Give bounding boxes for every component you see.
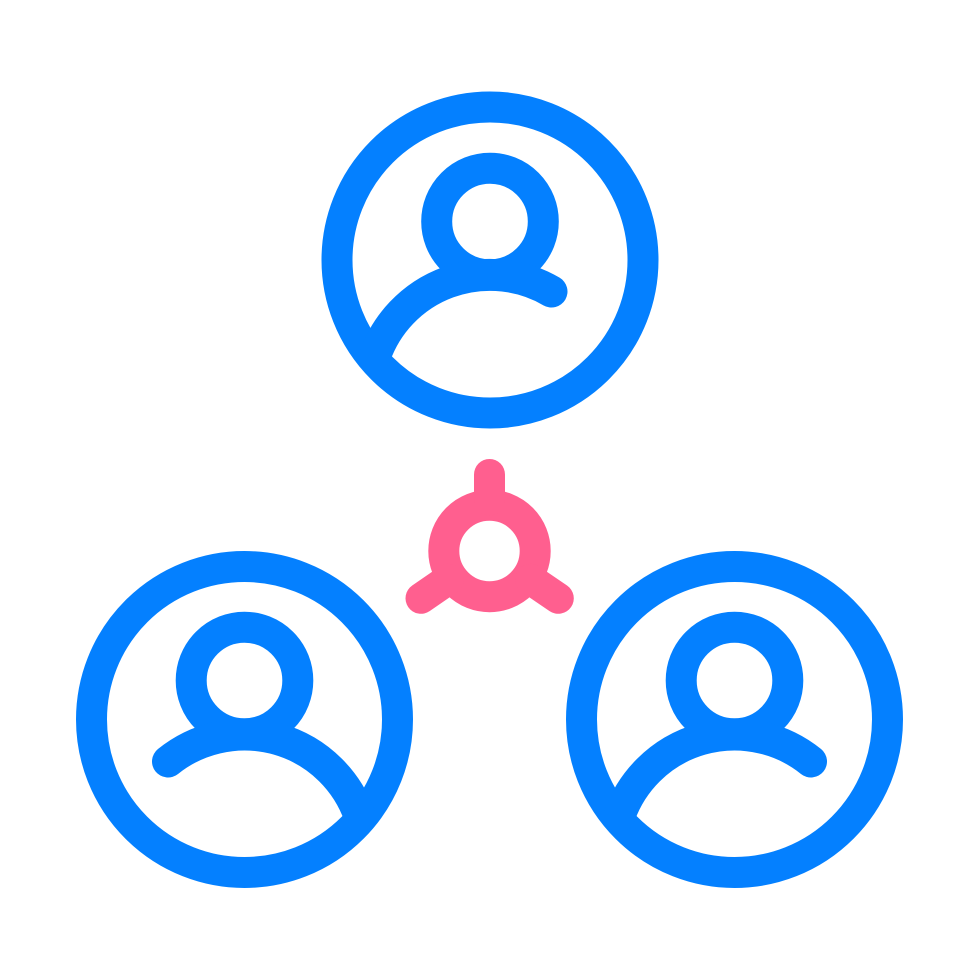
top user head (437, 168, 543, 275)
icon: top user (337, 107, 643, 413)
bottom right user shoulders (620, 735, 811, 816)
connector top arm (474, 474, 505, 500)
icon: central pink connector (421, 474, 558, 598)
bottom left user ring (92, 566, 398, 872)
icon: bottom right user (582, 566, 888, 872)
bottom left user head (191, 627, 298, 734)
bottom left user shoulders (168, 735, 360, 816)
bottom right user head (681, 627, 788, 734)
connector left arm (421, 579, 448, 598)
icon: bottom left user (92, 566, 398, 872)
connector right arm (531, 579, 558, 598)
top user shoulders (375, 275, 552, 356)
top user ring (337, 107, 643, 413)
connector hub ring (444, 505, 535, 597)
bottom right user ring (582, 566, 888, 872)
